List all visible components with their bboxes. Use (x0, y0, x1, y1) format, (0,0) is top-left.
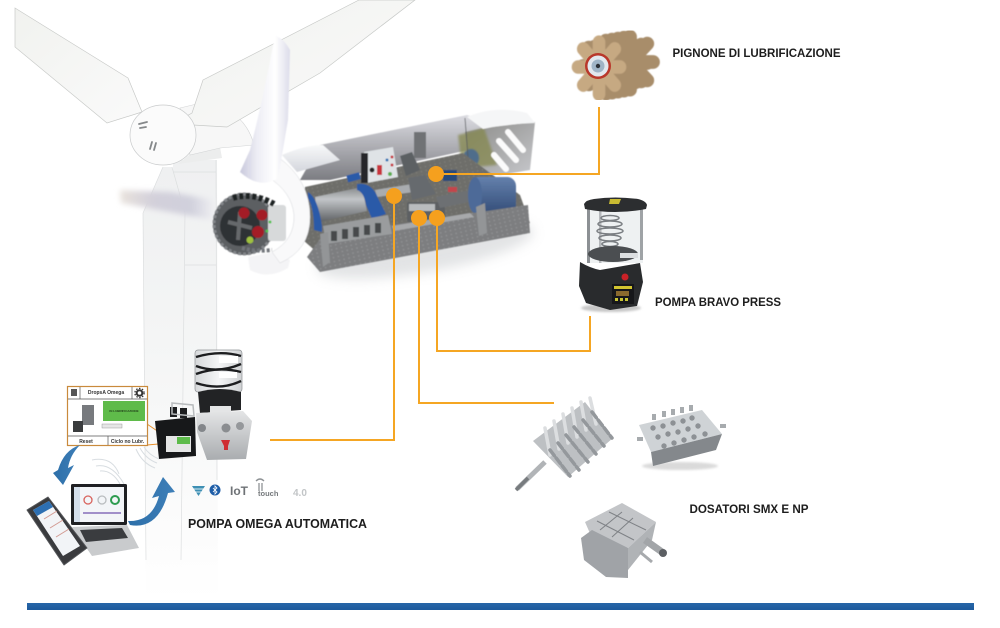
icon: wifi (192, 486, 205, 496)
icon: pump bravo press (579, 198, 647, 312)
icon: dosatore NP (637, 405, 726, 470)
blade: upper left (15, 8, 142, 123)
nacelle shadow (313, 209, 537, 291)
line: dispensers (419, 218, 554, 403)
arrow: devices to pump (128, 477, 175, 526)
main shaft and gearbox (315, 175, 478, 222)
label: pompa omega: POMPA OMEGA AUTOMATICA (188, 517, 367, 531)
turbine tower (143, 147, 222, 600)
label: pignone: PIGNONE DI LUBRIFICAZIONE (672, 46, 840, 60)
icon: lubrication pinion (578, 37, 653, 94)
icon: touch: touch (258, 489, 279, 498)
callout title: DropsA Omega (88, 390, 124, 396)
line: pump omega (270, 197, 394, 440)
green status box: IN LUBRIFICAZIONE (109, 409, 139, 413)
connectivity icons (192, 479, 307, 499)
label: pompa bravo: POMPA BRAVO PRESS (655, 295, 781, 309)
perforated back deck (303, 153, 530, 262)
rear hub (130, 105, 196, 165)
icon: dosatore SMX (516, 398, 613, 490)
icon: laptop (71, 484, 139, 556)
dispenser shadow (642, 462, 718, 470)
black base cap (198, 389, 241, 413)
blue generator (468, 177, 522, 222)
touchscreen callout (68, 386, 172, 446)
orange connection dots (386, 166, 445, 226)
callout pointer lines (147, 424, 172, 445)
nacelle front shell (282, 145, 340, 172)
icon: pump omega (155, 350, 252, 460)
rear window section (458, 110, 535, 175)
nacelle back wall (300, 115, 490, 180)
front blade (240, 35, 290, 183)
label: 4.0: 4.0 (293, 488, 307, 499)
blurred lower blade (120, 190, 214, 220)
controller (155, 403, 196, 459)
rear nacelle body (180, 102, 254, 155)
touchscreen callout: Ciclo no Lubr. (111, 439, 145, 445)
touchscreen callout: Reset (79, 439, 93, 445)
label: dosatori: DOSATORI SMX E NP (690, 502, 808, 516)
blue footer bar (27, 603, 974, 610)
control panel (361, 132, 426, 183)
orange connector lines (270, 107, 599, 440)
wireless signal waves (92, 447, 159, 484)
arrow: screen to devices (53, 445, 80, 485)
steel base frame (307, 203, 530, 272)
pump shadow (581, 304, 641, 312)
hub nose (248, 252, 290, 275)
reservoir (195, 350, 242, 392)
blade: upper right (185, 0, 415, 127)
cutaway nacelle (213, 35, 537, 291)
blue bearing mounts (308, 170, 457, 247)
rotor assembly (213, 193, 290, 275)
icon: settings gear (135, 388, 144, 398)
background wind turbine (15, 0, 415, 600)
line: pump bravo (437, 218, 590, 351)
manifold (196, 411, 252, 460)
icon: dosatore compatto (581, 503, 667, 578)
line: pinion (436, 107, 599, 174)
icon: bluetooth (210, 484, 220, 496)
nacelle cut shell (268, 157, 310, 263)
label: IoT: IoT (230, 484, 249, 498)
icon: smartphone (27, 497, 87, 565)
